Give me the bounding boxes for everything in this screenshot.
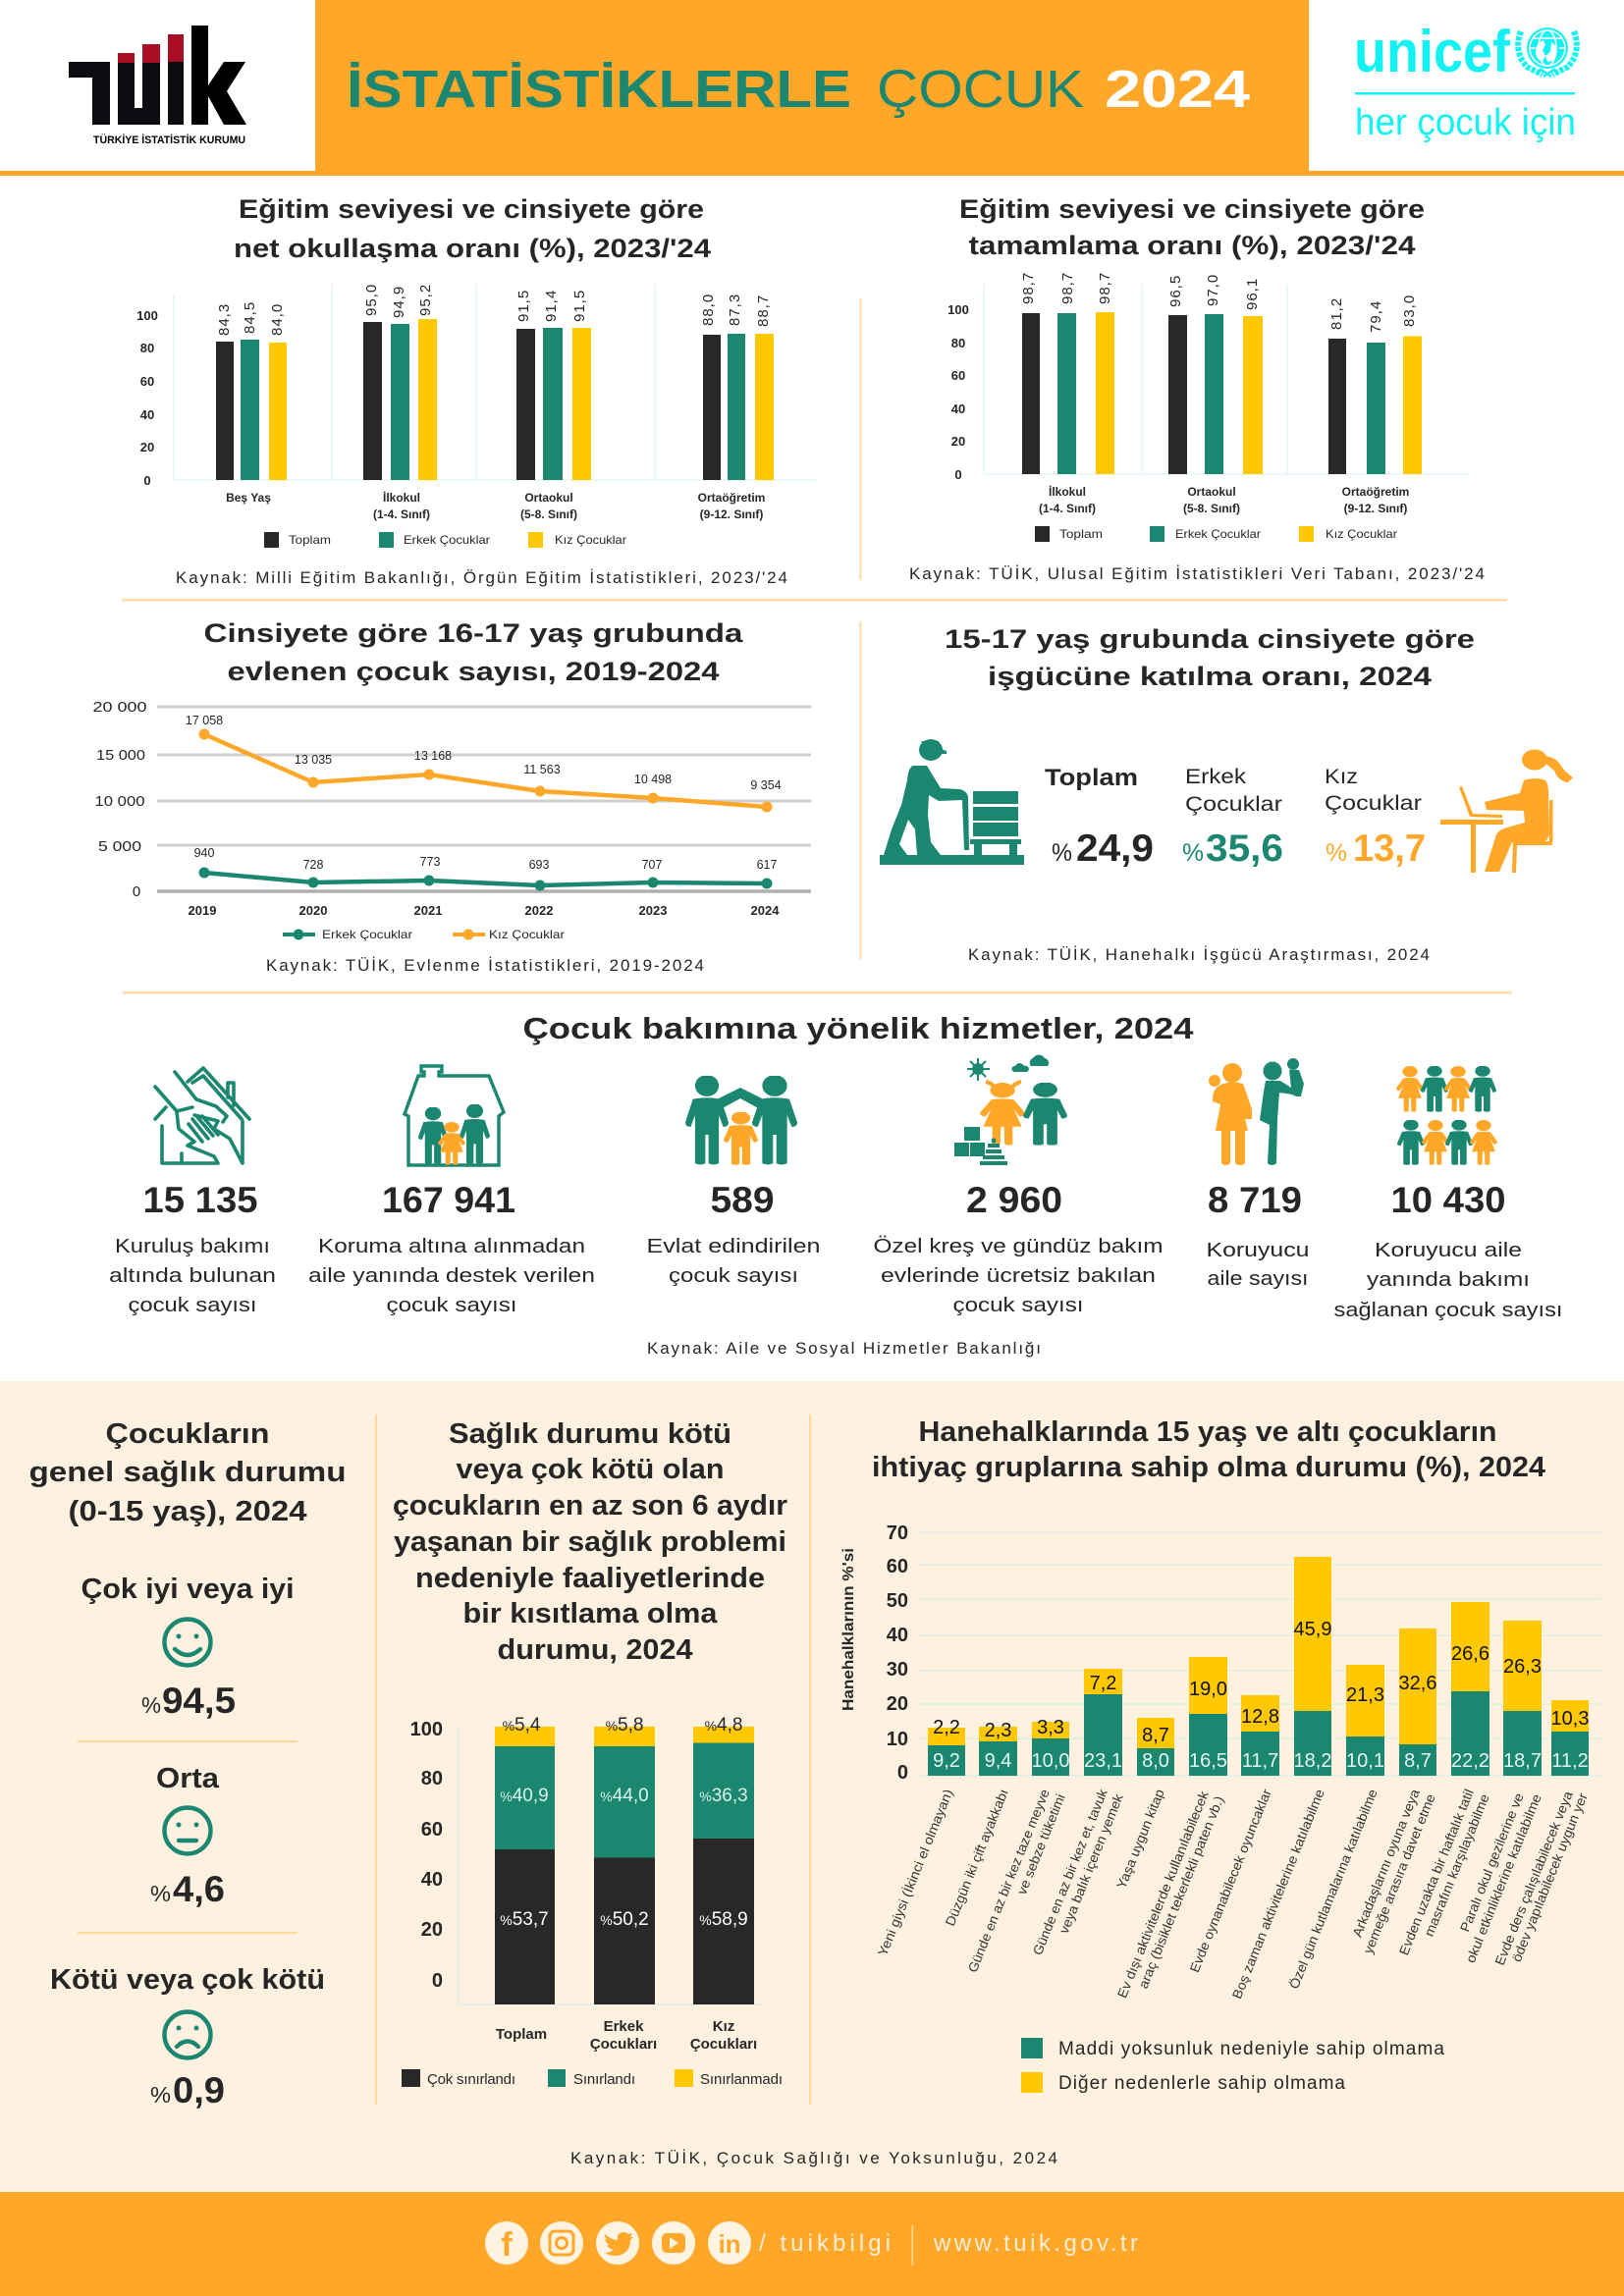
heading: net okullaşma: net okullaşma oranı (%), 2023/'24 [234,234,711,263]
heading: nedeniyle faaliyetlerinde [415,1563,765,1594]
bar chart: net okullaşma oranı: 80 [140,341,154,355]
stacked bar chart: Erkek [604,2018,644,2035]
heading: evlenen çocuk [204,618,744,686]
title: İstatistiklerle Çocuk 2024 [347,60,1250,119]
heading: Çocukların [106,1418,269,1450]
logo: unicef: unicef [1354,19,1511,84]
stacked bar chart: needs: 21,3 [1346,1684,1384,1706]
description: Evlat edindirilen [646,1235,821,1257]
stacked bar chart: needs: 11,7 [1242,1750,1278,1772]
bar chart: tamamlama oranı: 80 [951,336,965,350]
stacked bar chart: needs: 11,2 [1551,1750,1589,1772]
label: Kız Çocuklar [1325,766,1422,815]
stacked bar chart: needs: veya balık içeren yemek [1056,1791,1126,1936]
icon: sad face [165,2012,210,2057]
stacked bar chart: Çocukları [590,2036,657,2053]
bar chart: net okullaşma oranı: Beş Yaş [226,491,271,505]
line chart: evlenen çocuk sayısı: 11 563 [523,763,561,776]
stacked bar chart: needs: yemeğe arasıra davet etme [1361,1792,1438,1955]
description: Koruyucu [1206,1239,1310,1261]
stacked bar chart: needs: araç (bisiklet tekerlekli paten vb.) [1136,1794,1226,1991]
value: 589 [711,1180,774,1220]
stacked bar chart: needs: 0 [897,1762,908,1784]
line chart: evlenen çocuk sayısı: 2024 [751,903,780,918]
bar chart: net okullaşma oranı: 95,2 [417,284,434,316]
item: koruyucu aile [1206,1058,1310,1290]
header band [0,0,1624,176]
line chart: evlenen çocuk sayısı: 10 498 [634,773,672,786]
stacked bar chart: needs: 3,3 [1037,1717,1064,1738]
icon: twitter [596,2221,639,2265]
stacked bar chart: Sınırlandı [573,2071,635,2088]
bar chart: net okullaşma oranı: 100 [136,308,158,323]
line chart: evlenen çocuk sayısı: 20 000 [92,699,147,716]
bar chart: tamamlama oranı: 96,1 [1244,278,1261,310]
heading [393,1418,787,1666]
icon: worker with cart [880,739,1024,865]
bar chart: net okullaşma oranı: (5-8. Sınıf) [520,507,577,521]
bar chart: tamamlama oranı: (1-4. Sınıf) [1039,502,1096,515]
logo: TÜİK: TÜRKİYE İSTATİSTİK KURUMU [93,133,245,146]
value: bad: 0,9 [173,2070,225,2110]
description: aile sayısı [1208,1267,1308,1290]
heading: veya çok kötü olan [456,1454,725,1485]
description: çocuk sayısı [387,1294,516,1316]
icon: instagram [540,2221,583,2265]
description: çocuk sayısı [128,1294,257,1316]
bar chart: tamamlama oranı: (5-8. Sınıf) [1183,502,1240,515]
stacked bar chart: %4,8 [705,1715,742,1735]
bar chart: tamamlama oranı: 98,7 [1059,272,1076,304]
bar chart: net okullaşma oranı: 88,0 [700,294,717,326]
value: 167 941 [382,1180,515,1220]
stacked bar chart: needs: 40 [887,1625,908,1646]
line chart: evlenen çocuk sayısı: 2022 [525,903,553,918]
stacked bar chart: needs: 70 [887,1522,908,1544]
bar chart: tamamlama oranı: Ortaöğretim [1342,485,1409,499]
stacked bar chart: needs: 10,3 [1551,1708,1589,1730]
label: Toplam: Toplam [1045,765,1138,791]
stacked bar chart: needs: 9,2 [933,1750,960,1772]
label: Erkek Çocuklar: Erkek [1185,766,1247,788]
bar chart: tamamlama oranı: 81,2 [1328,297,1345,330]
bar chart: net okullaşma oranı: Erkek Çocuklar [404,533,490,547]
description [308,1235,595,1316]
bar chart: net okullaşma oranı: (9-12. Sınıf) [700,507,763,521]
bar chart: tamamlama oranı: 83,0 [1401,294,1418,327]
bar chart: tamamlama oranı: Ortaokul [1187,485,1236,499]
stacked bar chart: needs: 10,0 [1032,1750,1069,1772]
panel: general health [29,1418,346,2110]
stacked bar chart: needs: Boş zaman aktivitelerine katılabilme [1229,1788,1327,2001]
heading: bir kısıtlama olma [463,1598,718,1629]
description: yanında bakımı [1367,1268,1530,1291]
bar chart: net okullaşma oranı: 84,3 [216,303,233,336]
stacked bar chart: needs: 7,2 [1090,1673,1116,1694]
icon: facebook: f [501,2226,513,2264]
stacked bar chart: needs: Günde en az bir kez et, tavuk [1030,1787,1110,1957]
stacked bar chart: needs: 12,8 [1241,1706,1279,1728]
heading: evlenen çocuk: Cinsiyete göre 16-17 yaş grubunda [204,618,744,648]
heading: çocukların en az son 6 aydır [393,1490,787,1522]
bar chart: net okullaşma oranı: Kız Çocuklar [555,533,626,547]
icon: facebook [485,2221,528,2265]
line chart: evlenen çocuk sayısı: 9 354 [750,778,782,792]
value: medium: 4,6 [173,1869,225,1909]
stacked bar chart: needs: Özel gün kutlamalarına katılabilme [1286,1788,1380,1991]
heading: (0-15 yaş), 2024 [69,1496,306,1527]
bar chart: net okullaşma oranı [136,284,816,548]
value: kız: % [1326,839,1347,867]
stacked bar chart: needs [840,1522,1601,2001]
icon: happy face [165,1620,210,1665]
value: toplam: % [1052,839,1072,867]
bar chart: net okullaşma oranı: 94,9 [391,286,407,318]
heading: tamamlama [959,194,1425,260]
stacked bar chart: 60 [421,1819,443,1841]
icon: foster parents [1209,1058,1304,1165]
value: medium [150,1869,225,1909]
value: kız: 13,7 [1353,828,1426,870]
stacked bar chart: needs: 50 [887,1590,908,1612]
bar chart: net okullaşma oranı: 91,4 [543,290,560,322]
bar chart: net okullaşma oranı: 84,0 [269,303,286,336]
description: çocuk sayısı [952,1294,1084,1316]
line chart: evlenen çocuk sayısı: 15 000 [96,747,145,764]
bar chart: tamamlama oranı: 0 [954,467,962,482]
bar chart: net okullaşma oranı: Ortaöğretim [698,491,765,505]
legend: needs: Diğer nedenlerle sahip olmama [1058,2073,1345,2094]
source: İşgücü: Kaynak: TÜİK, Hanehalkı İşgücü Araştırması, 2024 [968,945,1430,964]
icon: parents sheltering child [685,1075,797,1165]
line chart: evlenen çocuk sayısı: 17 058 [186,714,223,727]
item: evlat edindirilen [646,1075,821,1287]
item: aile yanında destek [308,1066,595,1316]
description: Koruma altına alınmadan [318,1235,585,1257]
line chart: evlenen çocuk sayısı: 2019 [189,903,216,918]
stacked bar chart: needs: 26,3 [1503,1656,1542,1678]
heading: yaşanan bir sağlık problemi [394,1526,786,1558]
heading: işgücüne katılma: 15-17 yaş grubunda cinsiyete göre [945,624,1475,654]
bar chart: tamamlama oranı: 98,7 [1097,272,1113,304]
stacked bar chart: needs: Ev dışı aktivitelerde kullanılabilecek [1114,1789,1212,2001]
description: Özel kreş ve gündüz bakım [874,1235,1163,1257]
bar chart: tamamlama oranı: İlkokul [1049,484,1086,499]
value: good: % [141,1692,161,1718]
stacked bar chart: needs: Yeni giysi (İkinci el olmayan) [875,1788,955,1958]
stacked bar chart: 20 [421,1919,443,1941]
bar chart: tamamlama oranı: 96,5 [1167,275,1184,307]
source: Evlenme: Kaynak: TÜİK, Evlenme İstatistikleri, 2019-2024 [266,956,704,975]
bar chart: net okullaşma oranı: 60 [140,374,154,389]
bar chart: net okullaşma oranı: Toplam [289,533,331,547]
bar chart: tamamlama oranı: Toplam [1059,527,1103,541]
handle: / tuikbilgi [759,2230,891,2257]
bar chart: tamamlama oranı: 98,7 [1020,272,1037,304]
value: erkek: % [1182,839,1204,867]
legend: needs [1021,2038,1444,2094]
heading: durumu, 2024 [497,1634,693,1666]
stacked bar chart: needs: 60 [887,1556,908,1577]
logo: unicef: her çocuk için [1355,102,1576,143]
stacked bar chart: needs: 16,5 [1189,1750,1227,1772]
heading: net okullaşma [234,194,711,263]
source: Çocuk Sağlığı: Kaynak: TÜİK, Çocuk Sağlığı ve Yoksunluğu, 2024 [570,2149,1057,2167]
stacked bar chart: Toplam [496,2026,547,2043]
stacked bar chart: needs: masrafını karşılayabilme [1422,1792,1492,1939]
stacked bar chart: 80 [421,1768,443,1789]
line chart: evlenen çocuk sayısı [92,699,811,941]
heading: tamamlama: Eğitim seviyesi ve cinsiyete göre [959,194,1425,224]
line chart: evlenen çocuk sayısı: 728 [303,858,323,872]
heading: genel sağlık durumu [29,1457,346,1488]
bar chart: tamamlama oranı [947,272,1469,542]
bar chart: net okullaşma oranı: 91,5 [571,290,588,322]
value: 2 960 [966,1180,1062,1220]
icon: children group [1396,1066,1497,1165]
line chart: evlenen çocuk sayısı: 773 [420,855,440,869]
heading: Sağlık durumu kötü [449,1418,731,1450]
stacked bar chart: 40 [421,1869,443,1891]
stacked bar chart: needs: 19,0 [1189,1679,1227,1700]
line chart: evlenen çocuk sayısı: 617 [757,858,777,872]
description: aile yanında destek verilen [308,1264,595,1287]
title: İstatistiklerle Çocuk 2024: İSTATİSTİKLERLE [347,60,851,119]
title: İstatistiklerle Çocuk 2024: ÇOCUK [877,60,1084,119]
bar chart: net okullaşma oranı: 87,3 [727,294,743,326]
label: Erkek Çocuklar [1185,766,1282,816]
bar chart: net okullaşma oranı: 95,0 [363,284,380,316]
icon: hands and house [155,1068,249,1163]
stacked bar chart: %50,2 [600,1909,649,1930]
value: medium: % [150,1881,171,1906]
bar chart: tamamlama oranı: 40 [951,401,965,416]
label: Kız Çocuklar: Kız [1325,766,1358,788]
bar chart: tamamlama oranı: 79,4 [1368,300,1384,333]
heading: tamamlama: tamamlama oranı (%), 2023/'24 [968,231,1416,260]
heading: Hanehalklarında 15 yaş ve altı çocukların [919,1416,1496,1448]
icon: girl at laptop [1440,750,1573,873]
stacked bar chart: needs: 8,7 [1142,1725,1169,1746]
stacked bar chart: Çok sınırlandı [427,2071,515,2088]
stacked bar chart: needs: 10 [887,1729,908,1750]
description [109,1235,276,1316]
label: Kız Çocuklar: Çocuklar [1325,792,1422,815]
legend: needs: Maddi yoksunluk nedeniyle sahip olmama [1058,2039,1444,2059]
stacked bar chart: needs: 32,6 [1399,1673,1436,1694]
stacked bar chart: needs: 22,2 [1451,1750,1489,1772]
value: 10 430 [1390,1180,1506,1220]
value: 8 719 [1208,1180,1302,1220]
stacked bar chart: %40,9 [500,1786,549,1806]
title: İstatistiklerle Çocuk 2024: 2024 [1105,60,1250,119]
stacked bar chart: %5,8 [606,1715,643,1735]
stacked bar chart: needs: Evde oynanabilecek oyuncaklar [1187,1787,1274,1975]
stacked bar chart: needs: Hanehalklarının %'si [840,1548,857,1711]
bar chart: net okullaşma oranı: 91,5 [515,290,532,322]
stacked bar chart: needs: Düzgün iki çift ayakkabı [943,1788,1011,1928]
stacked bar chart: %5,4 [503,1715,541,1735]
bar chart: tamamlama oranı: 100 [947,302,969,317]
stacked bar chart: needs: 2,3 [985,1720,1011,1741]
line chart: evlenen çocuk sayısı: 13 035 [295,753,332,767]
stacked bar chart: needs: okul etkinliklerine katılabilme [1463,1792,1544,1965]
source: MEB: Kaynak: Milli Eğitim Bakanlığı, Örgün Eğitim İstatistikleri, 2023/'24 [176,568,787,587]
panel: needs groups [840,1416,1601,2094]
item: kuruluş bakımı [109,1068,276,1316]
heading [872,1416,1545,1483]
description: çocuk sayısı [669,1264,798,1287]
value: bad: % [150,2082,171,2108]
bar chart: tamamlama oranı: Kız Çocuklar [1326,527,1397,541]
icon: linkedin [708,2221,751,2265]
label: medium: Orta [156,1763,220,1794]
icon: children with blocks [954,1055,1067,1165]
description: Kuruluş bakımı [115,1235,270,1257]
stacked bar chart: needs: 18,7 [1503,1750,1542,1772]
logo: TÜİK [69,26,246,146]
heading: ihtiyaç gruplarına sahip olma durumu (%), 2024 [872,1452,1545,1483]
stacked bar chart: %36,3 [699,1786,748,1806]
bar chart: net okullaşma oranı: Ortaokul [524,491,573,505]
stacked bar chart: %58,9 [699,1909,748,1930]
line chart: evlenen çocuk sayısı: 0 [133,883,140,900]
bar chart: tamamlama oranı: Erkek Çocuklar [1175,527,1261,541]
bar chart: tamamlama oranı: 60 [951,368,965,383]
description [1333,1239,1563,1321]
bar chart: net okullaşma oranı: 88,7 [755,294,772,327]
bar chart: tamamlama oranı: (9-12. Sınıf) [1344,502,1407,515]
heading: işgücüne katılma [945,624,1475,691]
bar chart: net okullaşma oranı: 20 [140,440,154,454]
line chart: evlenen çocuk sayısı: 940 [194,846,214,860]
stacked bar chart [402,1715,783,2088]
stacked bar chart: needs: Arkadaşlarını oyuna veya [1350,1787,1423,1939]
source: Aile Bakanlığı: Kaynak: Aile ve Sosyal Hizmetler Bakanlığı [647,1339,1041,1358]
icon: linkedin: in [718,2229,741,2259]
value: 15 135 [143,1180,257,1220]
stacked bar chart: needs: Paralı okul gezilerine ve [1457,1791,1527,1934]
line chart: evlenen çocuk sayısı: 2023 [639,903,667,918]
label: Erkek Çocuklar: Çocuklar [1185,793,1282,816]
heading: evlenen çocuk: evlenen çocuk sayısı, 2019-2024 [228,657,719,686]
stacked bar chart: needs: 23,1 [1084,1750,1122,1772]
stacked bar chart: needs: Evde ders çalışılabilecek veya [1492,1789,1576,1967]
stacked bar chart: needs: Evden uzakta bir haftalık tatil [1396,1788,1477,1957]
heading: işgücüne katılma: işgücüne katılma oranı, 2024 [988,662,1432,691]
line chart: evlenen çocuk sayısı: 13 168 [414,749,452,763]
icon: youtube [652,2221,695,2265]
value: toplam: 24,9 [1076,828,1154,870]
bar chart: net okullaşma oranı: 40 [140,407,154,422]
panel: activity limitation [393,1418,787,2088]
heading: çocuk bakımı: Çocuk bakımına yönelik hizmetler, 2024 [522,1011,1194,1045]
description: Koruyucu aile [1375,1239,1522,1261]
item: koruyucu aile çocuk [1333,1066,1563,1321]
dividers row 1 [122,298,1512,993]
stacked bar chart: needs: 10,1 [1346,1750,1384,1772]
stacked bar chart: Kız [713,2018,734,2035]
heading [29,1418,346,1527]
panel: health background [0,1381,1624,2192]
heading: net okullaşma: Eğitim seviyesi ve cinsiyete göre [239,194,704,224]
item: kreş [874,1055,1163,1316]
icon: family in house [405,1066,504,1165]
stacked bar chart: needs: 9,4 [985,1750,1011,1772]
line chart: evlenen çocuk sayısı: Erkek Çocuklar [322,928,412,941]
icon: neutral face [165,1808,210,1853]
stacked bar chart: needs: 20 [887,1693,908,1715]
website: www.tuik.gov.tr [933,2230,1138,2257]
stacked bar chart: needs: Yaşa uygun kitap [1113,1788,1167,1891]
stacked bar chart: %53,7 [500,1909,549,1930]
bar chart: net okullaşma oranı: 0 [143,473,151,488]
stacked bar chart: needs: 30 [887,1659,908,1681]
stacked bar chart: needs: ödev yapılabilecek uygun yer [1509,1790,1591,1964]
bar chart: net okullaşma oranı: İlkokul [383,490,420,505]
stacked bar chart: needs: 45,9 [1294,1619,1331,1640]
line chart: evlenen çocuk sayısı: 707 [642,858,662,872]
line chart: evlenen çocuk sayısı: 2021 [414,903,442,918]
stacked bar chart: Çocukları [690,2036,757,2053]
description [1206,1239,1310,1290]
line chart: evlenen çocuk sayısı: Kız Çocuklar [489,928,565,941]
value: erkek: 35,6 [1206,828,1283,870]
description [874,1235,1163,1316]
bar chart: tamamlama oranı: 20 [951,434,965,449]
value: good: 94,5 [162,1681,236,1721]
bar chart: net okullaşma oranı: (1-4. Sınıf) [373,507,430,521]
description [646,1235,821,1287]
line chart: evlenen çocuk sayısı: 693 [529,858,549,872]
stacked bar chart: needs: ve sebze tüketimi [1014,1792,1068,1896]
value: bad [150,2070,225,2110]
footer band [0,2192,1624,2296]
stacked bar chart: needs: 26,6 [1451,1643,1489,1665]
stacked bar chart: Sınırlanmadı [700,2071,783,2088]
source: Ulusal Eğitim: Kaynak: TÜİK, Ulusal Eğitim İstatistikleri Veri Tabanı, 2023/'24 [909,564,1485,583]
stacked bar chart: needs: 8,0 [1142,1750,1169,1772]
stacked bar chart: 100 [410,1719,443,1740]
description: evlerinde ücretsiz bakılan [881,1264,1156,1287]
stacked bar chart: needs: 2,2 [933,1717,960,1738]
bar chart: net okullaşma oranı: 84,5 [242,301,258,334]
line chart: evlenen çocuk sayısı: 5 000 [98,838,141,855]
stacked bar chart: 0 [432,1970,443,1992]
line chart: evlenen çocuk sayısı: 2020 [299,903,327,918]
label: good: Çok iyi veya iyi [81,1574,295,1605]
label: bad: Kötü veya çok kötü [50,1964,325,1996]
logo: unicef [1354,19,1577,143]
bar chart: tamamlama oranı: 97,0 [1205,274,1221,306]
description: sağlanan çocuk sayısı [1333,1299,1563,1321]
stacked bar chart: %44,0 [600,1786,649,1806]
stacked bar chart: needs: Günde en az bir kez taze meyve [965,1788,1053,1975]
stacked bar chart: needs: 8,7 [1404,1750,1432,1772]
description: altında bulunan [109,1264,276,1287]
line chart: evlenen çocuk sayısı: 10 000 [94,793,145,810]
stacked bar chart: needs: 18,2 [1294,1750,1331,1772]
